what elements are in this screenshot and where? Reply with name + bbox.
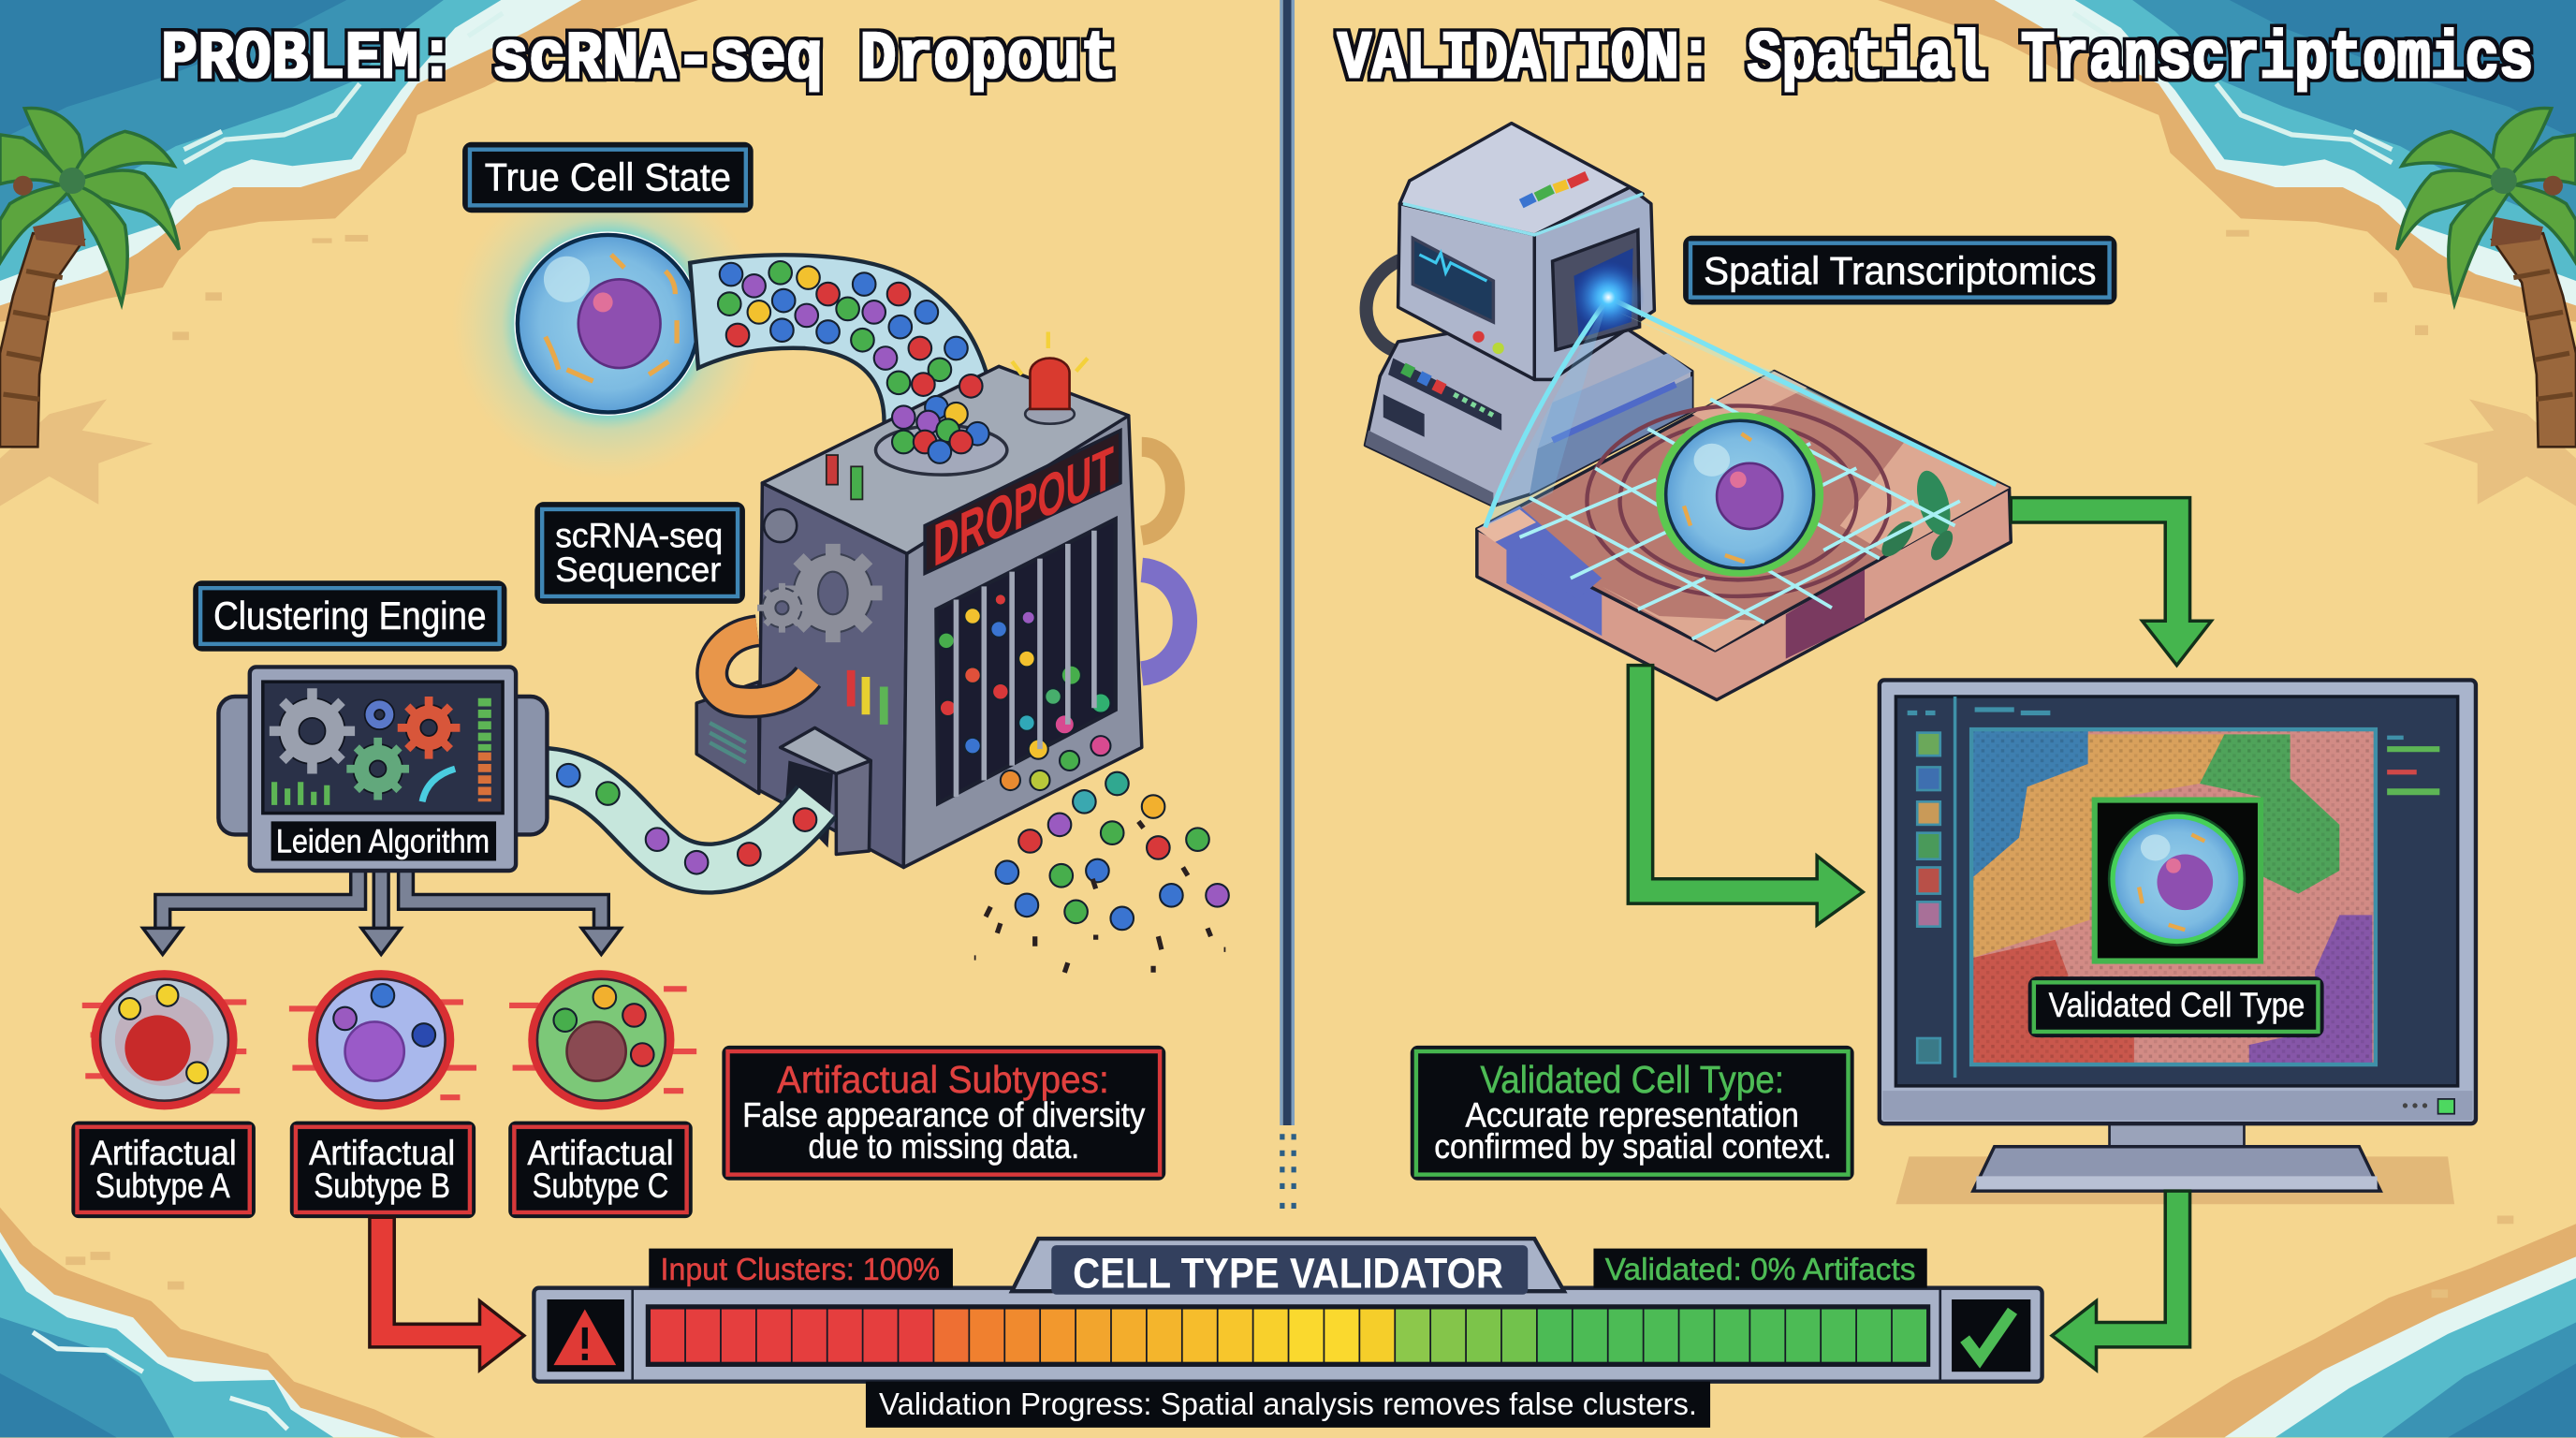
neck bbox=[2110, 1123, 2244, 1167]
scanning beams and grid bbox=[1486, 274, 1996, 639]
tube balls top bbox=[718, 261, 989, 463]
label: subtype C: Subtype C bbox=[533, 1167, 668, 1205]
buttons bbox=[1472, 331, 1485, 343]
left face bbox=[759, 483, 907, 867]
warning icon box bbox=[547, 1289, 633, 1380]
tissue block bbox=[1477, 372, 2011, 700]
label: subtype A bbox=[76, 1125, 252, 1214]
label: clustering engine: Clustering Engine bbox=[213, 594, 487, 638]
hose: purple bbox=[1142, 570, 1185, 673]
gears on screen bbox=[270, 688, 460, 800]
siren bbox=[1012, 331, 1088, 424]
barred window bbox=[936, 519, 1116, 803]
scanner base bbox=[1365, 329, 1692, 506]
screen top bar bbox=[1908, 710, 2050, 713]
validated tag: Validated: 0% Artifacts bbox=[1605, 1253, 1915, 1287]
leiden label bbox=[271, 821, 496, 860]
dropout sign panel bbox=[925, 431, 1120, 573]
lens housing bbox=[1553, 230, 1640, 350]
artifactual cell C bbox=[509, 975, 696, 1106]
label: validated cell type on screen bbox=[2032, 981, 2320, 1034]
label: spatial transcriptomics: Spatial Transcriptomics bbox=[1704, 249, 2097, 293]
beach: top-left water bbox=[0, 0, 698, 322]
artifactual cell A bbox=[82, 975, 246, 1106]
falling transcripts bbox=[974, 772, 1229, 973]
palm tree left bbox=[0, 108, 179, 447]
display bbox=[1412, 238, 1493, 322]
beach: bottom-right water bbox=[2143, 1224, 2576, 1437]
center divider bbox=[1280, 0, 1296, 1206]
callout: validated cell type: Validated Cell Type: bbox=[1480, 1058, 1784, 1101]
validator frame bbox=[534, 1288, 2042, 1382]
label: subtype B bbox=[294, 1125, 472, 1214]
orange hose bbox=[712, 631, 809, 702]
callout: artifactual subtypes: due to missing data. bbox=[809, 1127, 1079, 1166]
callout: artifactual subtypes bbox=[726, 1049, 1162, 1176]
tube of transcripts into sequencer bbox=[690, 255, 997, 431]
label: sequencer bbox=[539, 506, 741, 599]
leiden text: Leiden Algorithm bbox=[276, 824, 490, 860]
label: sequencer: Sequencer bbox=[555, 550, 721, 589]
dropout sign text: DROPOUT bbox=[933, 433, 1114, 580]
label: subtype C: Artifactual bbox=[527, 1134, 674, 1172]
base bbox=[1973, 1147, 2380, 1191]
red arrow to validator bbox=[370, 1217, 524, 1370]
bezel bbox=[1880, 680, 2476, 1123]
progress caption: Validation Progress: Spatial analysis removes false clusters. bbox=[879, 1387, 1697, 1422]
gears bbox=[757, 544, 882, 642]
label: subtype A: Subtype A bbox=[95, 1167, 230, 1205]
palm shadow left bbox=[0, 399, 153, 506]
label: clustering engine bbox=[198, 585, 503, 647]
knob bbox=[764, 509, 797, 542]
callout: artifactual subtypes: False appearance of diversity bbox=[742, 1096, 1146, 1135]
callout: validated cell type: confirmed by spatial context. bbox=[1434, 1127, 1832, 1166]
low side box bbox=[696, 682, 759, 794]
tube to clustering engine bbox=[542, 764, 816, 874]
arrows from leiden to subtypes bbox=[143, 871, 621, 954]
funnel collar bbox=[875, 425, 1007, 475]
scanner head top bbox=[1399, 124, 1643, 235]
scanner head left face bbox=[1398, 181, 1553, 379]
label: subtype B: Subtype B bbox=[314, 1167, 450, 1205]
monitor stand shadow bbox=[1895, 1156, 2454, 1204]
spatial map bbox=[1971, 729, 2376, 1064]
label: true cell state: True Cell State bbox=[485, 155, 731, 199]
beach: bottom-left water bbox=[0, 1208, 435, 1437]
led strip bbox=[1521, 198, 1534, 204]
toggles bbox=[827, 455, 838, 485]
label: subtype B: Artifactual bbox=[309, 1134, 455, 1172]
progress bar bbox=[646, 1304, 1930, 1367]
label: spatial transcriptomics bbox=[1687, 240, 2113, 301]
validator panel bbox=[534, 1239, 2042, 1428]
artifactual cell B bbox=[289, 975, 476, 1106]
label: validated cell type on screen: Validated Cell Type bbox=[2049, 986, 2305, 1024]
label: sequencer: scRNA-seq bbox=[555, 516, 723, 554]
monitor bbox=[1880, 680, 2476, 1191]
validator title tab: CELL TYPE VALIDATOR bbox=[1073, 1250, 1503, 1298]
palm tree right bbox=[2397, 108, 2576, 447]
callout: validated cell type: Accurate representation bbox=[1466, 1096, 1799, 1135]
scanner head right face bbox=[1534, 187, 1654, 379]
status bars bbox=[849, 670, 854, 707]
chute housing bbox=[781, 727, 871, 854]
top face bbox=[762, 366, 1129, 553]
green arrow: tissue to map bbox=[1628, 666, 1863, 925]
balls in window bbox=[938, 594, 1110, 790]
label: subtype C bbox=[513, 1125, 688, 1214]
check icon box bbox=[1940, 1289, 2030, 1380]
right face bbox=[903, 416, 1142, 867]
cable bbox=[1367, 259, 1401, 352]
label: subtype A: Artifactual bbox=[91, 1134, 237, 1172]
clustering engine machine bbox=[218, 667, 547, 871]
hose: rainbow bbox=[1142, 447, 1175, 536]
beach: top-right water bbox=[1878, 0, 2576, 322]
validated cell on tissue bbox=[1656, 412, 1823, 577]
inset cell bbox=[2095, 800, 2261, 961]
green arrow: tissue to monitor bbox=[2011, 498, 2211, 666]
callout: artifactual subtypes: Artifactual Subtypes: bbox=[777, 1058, 1109, 1101]
spatial scanner machine bbox=[1365, 124, 1692, 506]
green arrow: monitor to validator bbox=[2052, 1191, 2190, 1370]
label: true cell state bbox=[466, 146, 749, 209]
callout: validated cell type bbox=[1414, 1049, 1850, 1176]
input clusters tag: Input Clusters: 100% bbox=[661, 1253, 940, 1287]
palm shadow right bbox=[2423, 399, 2576, 506]
sand footprints bbox=[66, 230, 2513, 1298]
title: problem: PROBLEM: scRNA-seq Dropout bbox=[161, 21, 1117, 97]
sequencer machine bbox=[696, 331, 1142, 867]
legend bars bbox=[2387, 737, 2404, 739]
true cell state cell bbox=[452, 168, 764, 479]
sidebar bbox=[1917, 733, 1940, 1063]
